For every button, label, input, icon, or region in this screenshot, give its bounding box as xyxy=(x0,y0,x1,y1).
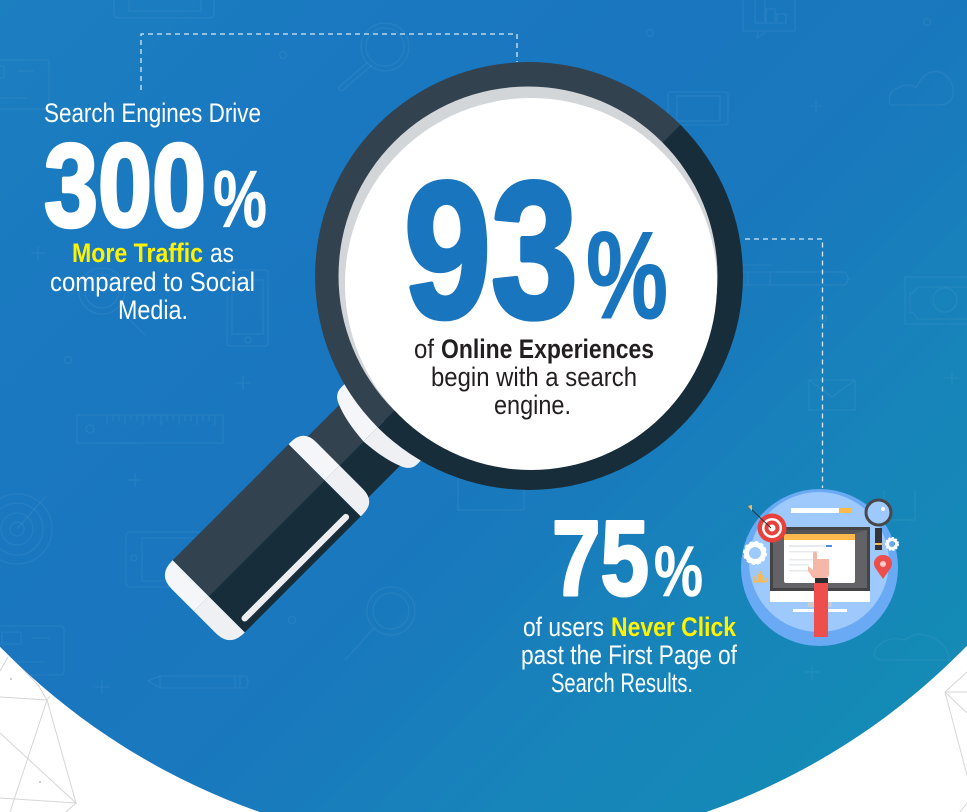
caption: never click: Search Results. xyxy=(551,668,693,698)
caption: online experiences: engine. xyxy=(494,390,571,420)
handle xyxy=(156,376,429,649)
stat: 75 percent: 75 xyxy=(552,498,649,618)
stat: 93 percent: 93 xyxy=(404,142,578,359)
stat: 75 percent: % xyxy=(654,533,703,612)
magnifying glass xyxy=(156,0,832,649)
caption: online experiences xyxy=(414,334,654,420)
caption: more traffic: More Traffic xyxy=(72,238,203,268)
caption: more traffic: compared to Social xyxy=(50,267,255,297)
monitor xyxy=(770,527,870,612)
caption: online experiences: Online Experiences xyxy=(441,334,654,364)
dashed connector: left xyxy=(141,34,517,90)
caption: never click: of users xyxy=(523,612,604,642)
stat: 93 percent xyxy=(404,142,668,420)
caption: never click: Never Click xyxy=(611,612,737,642)
stat: 75 percent xyxy=(521,498,737,698)
corner network decoration xyxy=(0,645,967,812)
caption: never click xyxy=(521,612,737,698)
stat: 300 percent: % xyxy=(213,155,267,245)
gears xyxy=(745,538,898,563)
search bar xyxy=(791,508,851,513)
caption: more traffic: as xyxy=(210,238,234,268)
icon: search results badge xyxy=(741,489,898,646)
caption: online experiences: begin with a search xyxy=(431,362,637,392)
dashed connector: right xyxy=(745,239,822,488)
caption: never click: past the First Page of xyxy=(521,640,737,670)
caption: more traffic xyxy=(50,238,255,325)
location pin xyxy=(874,555,892,579)
caption: online experiences: of xyxy=(414,334,434,364)
ring xyxy=(226,0,832,579)
hand and arm xyxy=(808,552,829,637)
lens xyxy=(338,86,718,466)
caption: more traffic: Media. xyxy=(118,295,188,325)
small magnifier xyxy=(866,500,891,550)
lead-in text: Search Engines Drive xyxy=(44,98,261,128)
stat: 300 percent xyxy=(44,98,267,325)
small bar chart xyxy=(753,571,767,582)
target xyxy=(748,505,786,542)
stat: 300 percent: 300 xyxy=(44,120,206,252)
stat: 93 percent: % xyxy=(586,207,668,345)
